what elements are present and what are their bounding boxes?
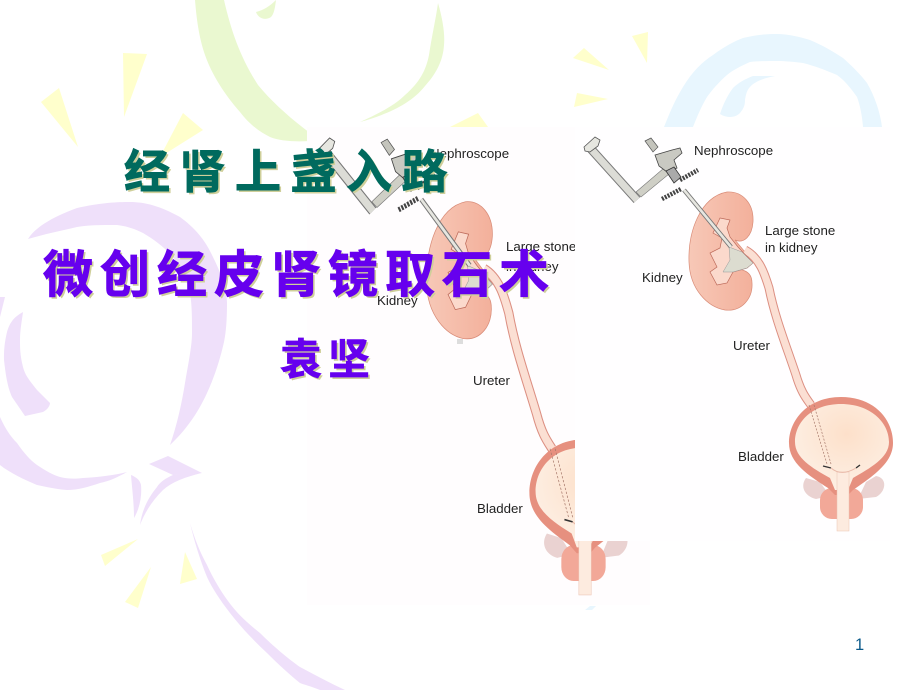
labels: left illustration: Nephroscope: [430, 146, 509, 161]
background ribbon: light blue: [585, 34, 882, 610]
author name: 袁坚: [280, 336, 376, 383]
page number: 1: [855, 636, 864, 654]
labels: right illustration: Large stone: [765, 223, 835, 238]
labels: left illustration: [377, 146, 576, 516]
labels: right illustration: Bladder: [738, 449, 784, 464]
panel: left urinary tract illustration: [307, 127, 650, 605]
labels: right illustration: Ureter: [733, 338, 771, 353]
diagram: nephroscope, kidney, ureter and bladder (left): [318, 138, 637, 595]
labels: left illustration: Ureter: [473, 373, 511, 388]
labels: left illustration: Large stone: [506, 239, 576, 254]
title: surgical approach: 经肾上盏入路: [124, 146, 457, 198]
labels: right illustration: Kidney: [642, 270, 683, 285]
background ribbon: purple: [0, 202, 345, 690]
labels: right illustration: [642, 143, 835, 464]
labels: left illustration: Bladder: [477, 501, 523, 516]
labels: right illustration: in kidney: [765, 240, 818, 255]
labels: right illustration: Nephroscope: [694, 143, 773, 158]
panel: right urinary tract illustration: [575, 127, 893, 541]
stray grey mark: [457, 339, 463, 344]
title: procedure name: 微创经皮肾镜取石术: [43, 247, 556, 303]
labels: left illustration: Kidney: [377, 293, 418, 308]
background triangles: yellow: [41, 32, 648, 608]
diagram: nephroscope, kidney, ureter and bladder (right): [584, 137, 893, 531]
background ribbon: green: [195, 0, 444, 141]
labels: left illustration: in kidney: [506, 259, 559, 274]
